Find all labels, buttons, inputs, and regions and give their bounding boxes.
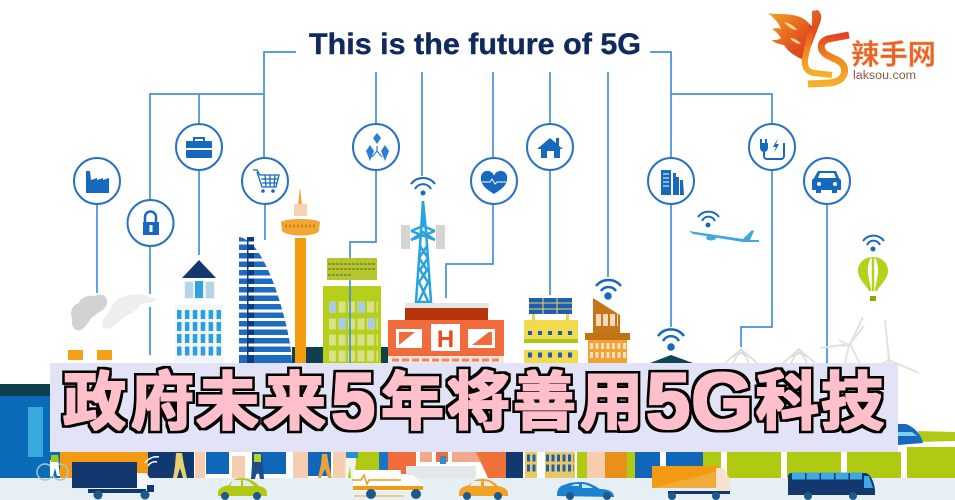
icon: shopping cart [242,158,288,204]
logo: site url: laksou.com [853,70,916,82]
ambulance [352,470,423,499]
wifi signal: truck [145,457,159,466]
green car [218,478,267,500]
wifi signal: plane [698,212,719,226]
blue car [557,482,614,500]
left dark band and blue block [0,384,50,478]
icon: office buildings [648,158,694,204]
building: green with billboard [323,258,381,363]
connector over green building [349,286,351,363]
building: orange and brown [585,298,630,363]
delivery truck [72,462,154,500]
hospital: H [437,326,454,353]
logo: site name: 辣手网 [851,39,936,70]
hot air balloon [858,257,888,301]
cyclist [37,455,68,480]
caption headline: 5G [646,356,753,445]
wifi signal: rooftop [596,280,621,298]
cell tower [401,201,445,302]
building: navy roof tower [175,260,223,363]
icon: people network [353,124,399,170]
caption headline: 科技 [756,368,884,438]
connector lines [97,52,827,363]
wifi signal: tower [411,178,435,194]
hospital [388,303,504,363]
building: dark base band [292,347,389,363]
icon: house [527,124,573,170]
factory chimneys [68,350,112,360]
smoke clouds [71,294,157,330]
icon: briefcase [176,124,222,170]
orange lorry [652,466,730,500]
building: solar roof [524,298,578,363]
wifi signal: balloon [863,236,884,250]
caption headline: 政府未来 [63,368,326,438]
caption banner [50,363,898,452]
logo: flame and LS monogram [768,10,849,84]
orange car [459,479,508,500]
building: sail tower [239,237,292,363]
road [0,478,955,500]
icon: car [804,158,850,204]
pedestrians [173,452,446,479]
dark roof [650,355,693,363]
icon: power plug [749,124,795,170]
caption headline: 5 [331,356,376,445]
street level buildings [50,447,955,478]
icon: padlock [128,200,174,246]
wind turbines [820,317,919,373]
caption headline: 年将善用 [381,368,643,438]
airplane [689,230,759,242]
bus [788,473,875,500]
building: orange observation tower [281,187,320,363]
icon: factory [74,158,120,204]
power pylons [725,349,815,363]
wifi signal: dark roof [658,329,684,350]
icon: heart monitor [471,158,517,204]
title: This is the future of 5G [309,28,641,61]
bullet train and rail [898,424,955,445]
